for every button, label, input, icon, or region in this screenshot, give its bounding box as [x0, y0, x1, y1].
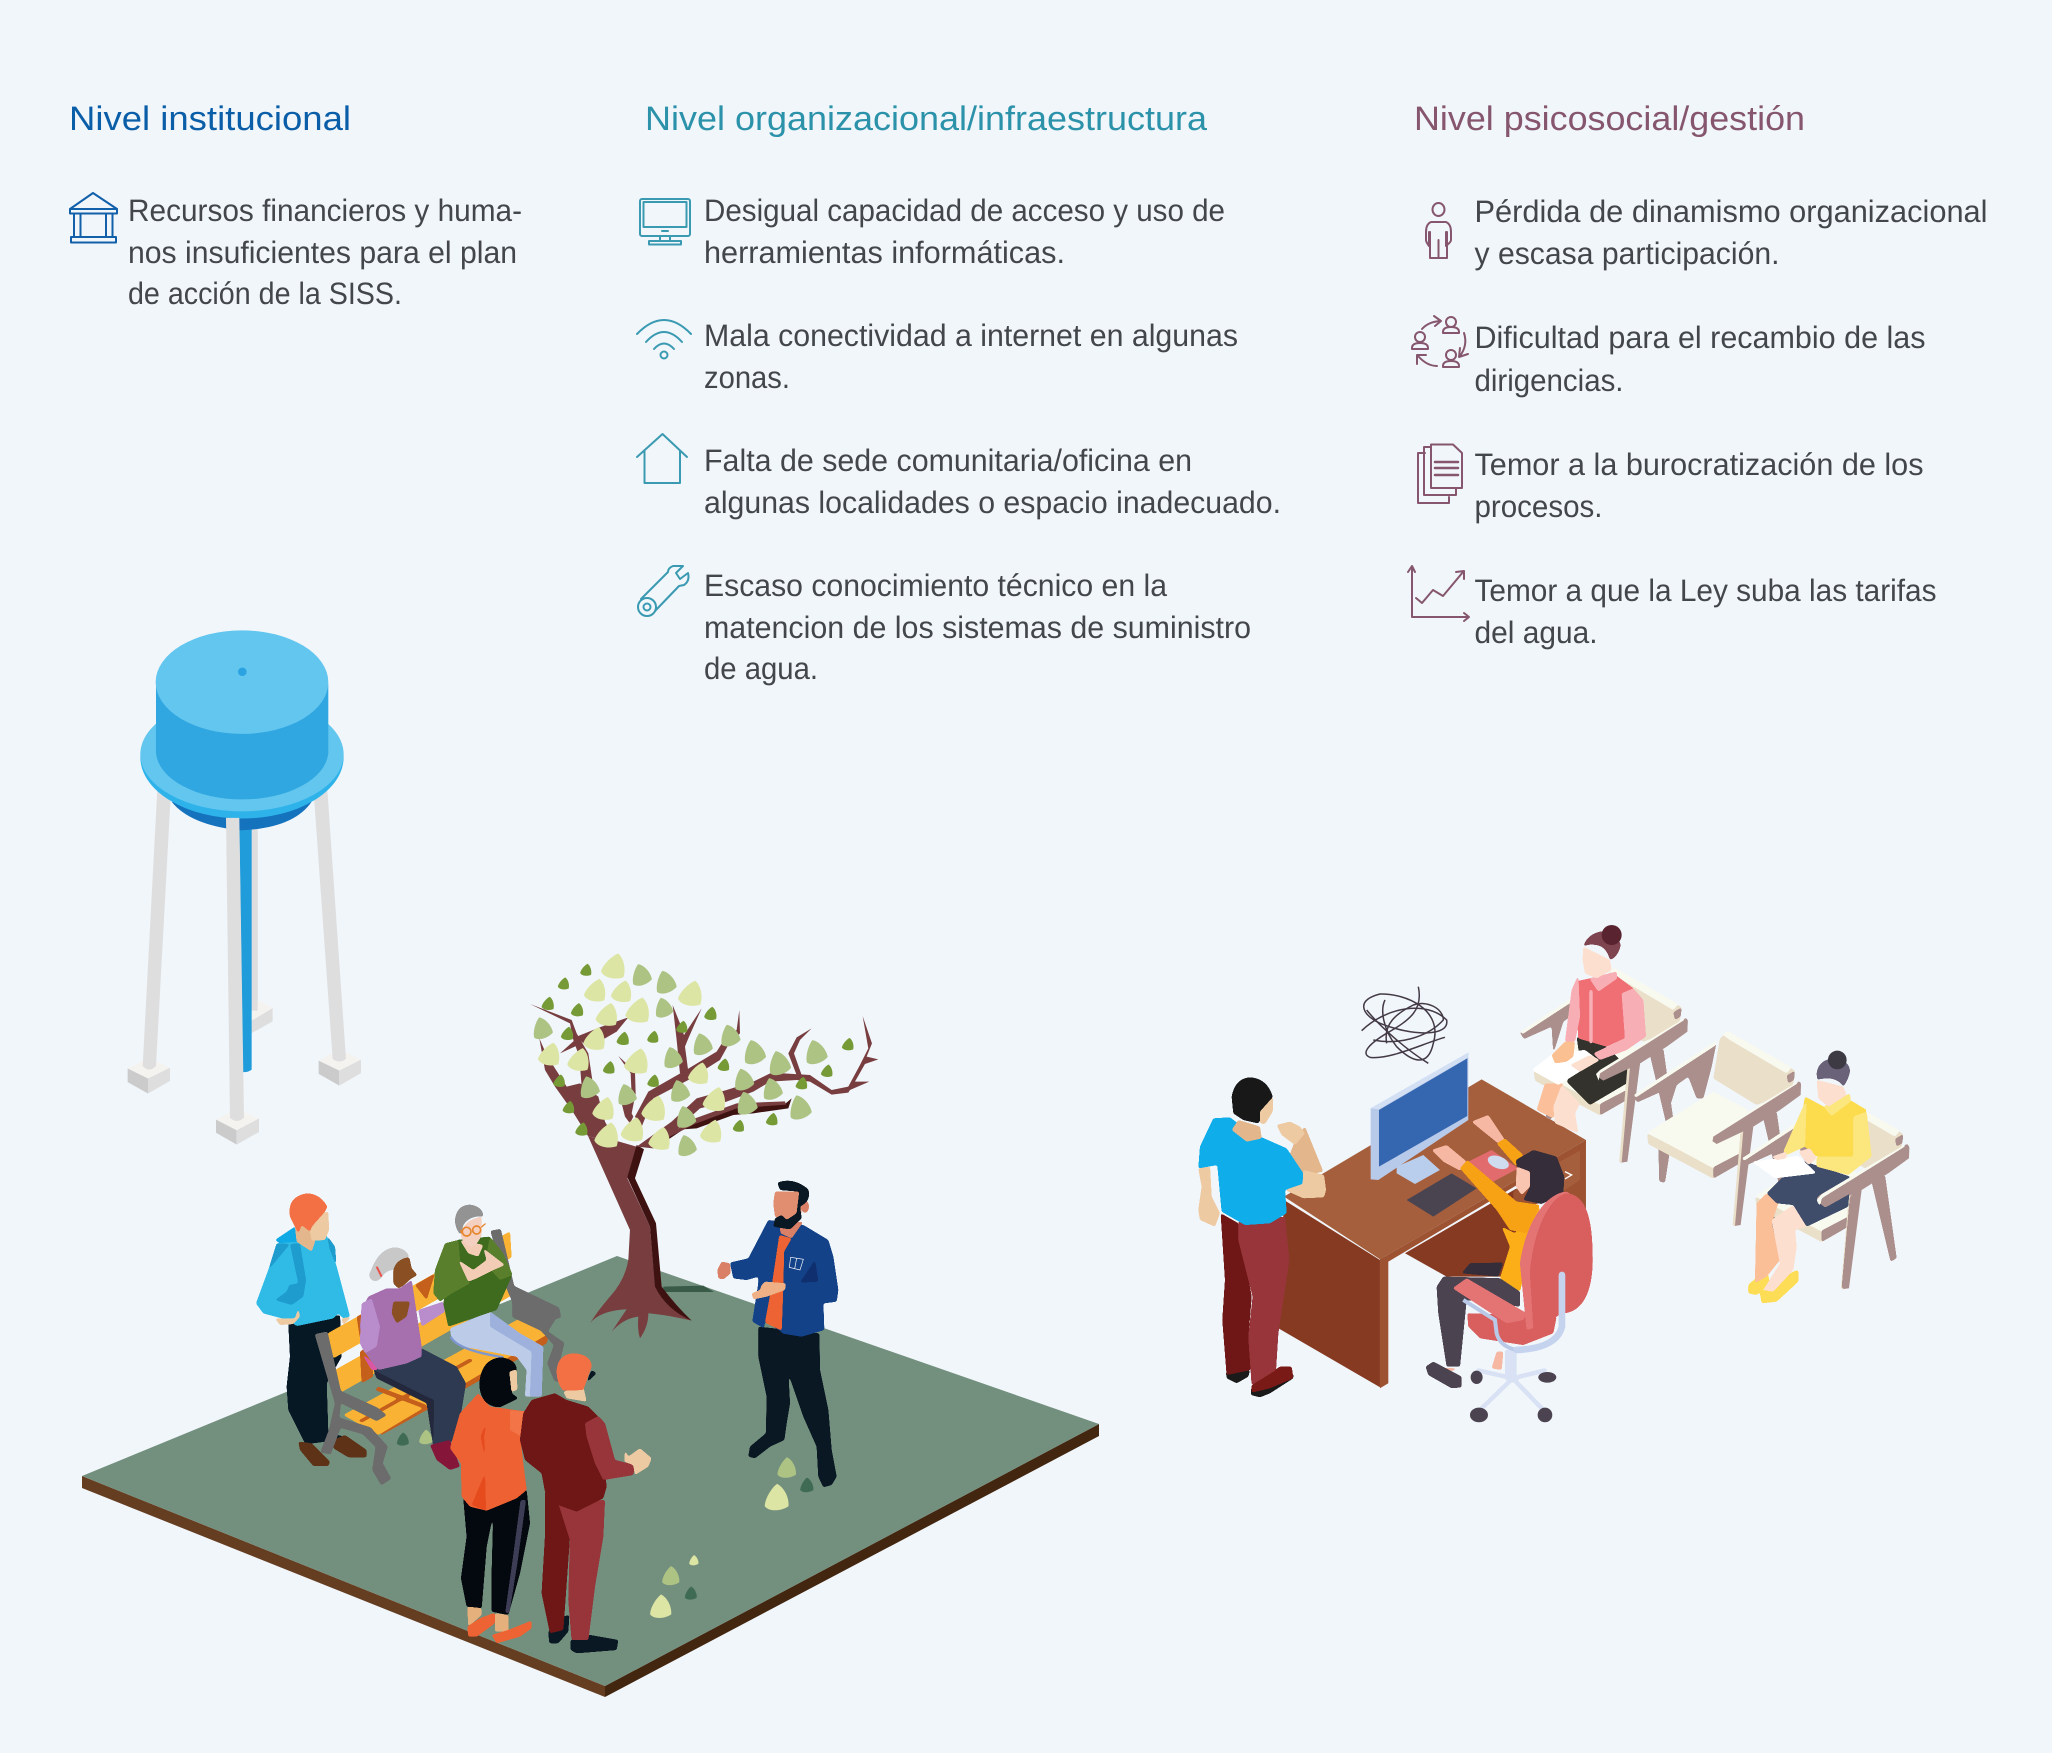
- woman with orange blouse: [450, 1357, 532, 1643]
- woman in yellow: [1748, 1051, 1908, 1303]
- computer monitor and keyboard: [1371, 1053, 1518, 1217]
- text list: gestión: Pérdida de dinamismo organizacional: [1474, 194, 1988, 229]
- text list: gestión: Temor a la burocratización de los: [1474, 447, 1924, 482]
- woman with purple sweater: [360, 1247, 470, 1470]
- text list: infraestructura: algunas localidades o espacio inadecuado.: [704, 485, 1281, 520]
- text list: infraestructura: de agua.: [704, 651, 818, 686]
- woman in pink: [1532, 925, 1646, 1133]
- man in dark red: [520, 1353, 652, 1653]
- icon: rotation of people: [1412, 316, 1468, 367]
- illustration: office scene with desk: [1198, 987, 1593, 1422]
- icon: institution building: [70, 193, 117, 242]
- icon: documents: [1418, 444, 1462, 503]
- text: recursos: Recursos financieros y huma-: [128, 193, 522, 228]
- text list: infraestructura: Escaso conocimiento técnico en la: [704, 568, 1168, 603]
- text list: gestión: Temor a que la Ley suba las tarifas: [1474, 573, 1936, 608]
- text list: gestión: Dificultad para el recambio de las: [1474, 320, 1926, 355]
- scribble of confusion: [1362, 987, 1447, 1063]
- figure group: people at the bench: [256, 1193, 652, 1653]
- column: Nivel organizacional/infraestructura: [637, 100, 1281, 686]
- text list: infraestructura: Falta de sede comunitaria/oficina en: [704, 443, 1192, 478]
- text list: gestión: del agua.: [1474, 615, 1598, 650]
- standing man in blue t-shirt: [1198, 1077, 1326, 1397]
- text: recursos: de acción de la SISS.: [128, 276, 402, 311]
- illustration: ground plate: [82, 1256, 1099, 1697]
- text: recursos: nos insuficientes para el plan: [128, 235, 517, 270]
- text: recursos: [128, 193, 522, 311]
- icon: house: [637, 434, 687, 483]
- icon: person: [1426, 203, 1451, 258]
- bench: [316, 1230, 563, 1484]
- chair 2 (empty): [1633, 1031, 1801, 1226]
- illustration: water tower: [128, 630, 361, 1145]
- text list: infraestructura: Mala conectividad a internet en algunas: [704, 318, 1238, 353]
- text list: gestión: dirigencias.: [1474, 363, 1624, 398]
- heading: Nivel organizacional/infraestructura: Nivel organizacional/infraestructura: [645, 100, 1207, 138]
- chair 3: [1742, 1095, 1909, 1289]
- fallen leaves on the ground: [397, 1430, 813, 1618]
- text list: gestión: procesos.: [1474, 489, 1602, 524]
- icon: wifi: [637, 320, 691, 358]
- desk: [1278, 1079, 1586, 1388]
- heading: Nivel institucional: Nivel institucional: [69, 100, 351, 138]
- chair 1: [1520, 968, 1688, 1163]
- text list: gestión: [1474, 194, 1988, 650]
- seated woman on office chair: [1426, 1115, 1593, 1422]
- illustration: tree: [530, 950, 878, 1338]
- figure: man in blue jacket: [717, 1181, 838, 1487]
- text list: infraestructura: [704, 193, 1281, 686]
- text list: infraestructura: zonas.: [704, 360, 790, 395]
- text list: gestión: y escasa participación.: [1474, 236, 1780, 271]
- icon: wrench: [638, 566, 688, 616]
- heading: Nivel psicosocial/gestión: Nivel psicosocial/gestión: [1414, 100, 1805, 138]
- column: Nivel psicosocial/gestión: [1408, 100, 1988, 650]
- column: Nivel institucional: [69, 100, 522, 311]
- icon: rising chart: [1408, 566, 1469, 621]
- man with green shirt: [433, 1205, 543, 1397]
- chair 1 near arm in front of the woman: [1596, 1018, 1688, 1163]
- icon: computer monitor: [640, 199, 690, 244]
- illustration: waiting room chairs with two women: [1520, 925, 1909, 1303]
- text list: infraestructura: herramientas informáticas.: [704, 235, 1065, 270]
- text list: infraestructura: matencion de los sistemas de suministro: [704, 610, 1251, 645]
- man with backpack: [256, 1193, 367, 1466]
- leaves: [530, 950, 855, 1158]
- text list: infraestructura: Desigual capacidad de acceso y uso de: [704, 193, 1225, 228]
